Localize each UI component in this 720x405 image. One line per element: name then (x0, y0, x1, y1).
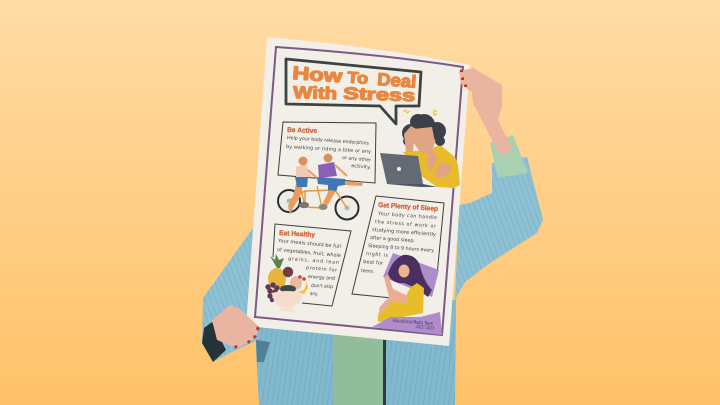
eat healthy text: don't skip (311, 283, 333, 290)
icon: tandem bicycle riders (278, 154, 363, 220)
person holding poster (202, 68, 543, 405)
left hand holding poster (212, 305, 260, 349)
title: How (292, 62, 344, 87)
eat healthy text: grains, and lean (288, 256, 339, 266)
title: With (293, 83, 337, 103)
sleep text: after a good sleep. (370, 235, 415, 244)
be active heading: Be Active (287, 127, 317, 135)
footer credit (393, 318, 434, 332)
sleep text (361, 211, 437, 275)
sleep text: the stress of work or (375, 219, 436, 230)
eat healthy heading: Eat Healthy (279, 230, 315, 239)
right hand and forearm (460, 68, 513, 155)
title speech bubble (286, 59, 421, 124)
be active text: activity. (351, 163, 371, 171)
eat healthy text: energy and (308, 274, 335, 282)
sleep box (352, 196, 444, 298)
panel: eat healthy (273, 224, 351, 306)
right fingers over poster edge (459, 68, 488, 92)
panel: get plenty of sleep (352, 196, 444, 298)
eat healthy text: any. (310, 292, 318, 297)
right sleeve (455, 157, 543, 300)
left cuff (202, 322, 226, 362)
title: Deal (377, 69, 417, 92)
poster frame (255, 47, 463, 335)
icon: fruit bowl (265, 254, 308, 312)
nails (460, 69, 467, 87)
sleep text: studying more efficiently (372, 227, 436, 238)
eat healthy text: protein for (306, 265, 337, 274)
sleep text: Sleeping 8 to 9 hours every (368, 243, 434, 254)
be active text (286, 135, 371, 171)
be active text: by walking or riding a bike or any (286, 144, 371, 155)
be active box (278, 122, 376, 183)
nails (234, 326, 260, 349)
poster sheet (246, 37, 470, 346)
jacket torso (255, 300, 456, 405)
eat healthy text: of vegetables, fruit, whole (277, 247, 341, 259)
eat healthy box (273, 224, 351, 306)
footer credit: Educational Media Team (393, 318, 434, 327)
sleep heading: Get Plenty of Sleep (378, 202, 438, 213)
icon: stressed woman with laptop (380, 110, 460, 188)
sleep text: teens. (361, 268, 374, 275)
sleep text: night is (366, 251, 389, 259)
be active text: or any other (342, 155, 371, 164)
title: To (347, 70, 369, 88)
left sleeve (202, 228, 258, 362)
be active text: Help your body release endorphins (287, 135, 370, 147)
title (292, 62, 417, 105)
sleep text: Your body can handle (377, 211, 437, 221)
sleep text: best for (363, 259, 383, 267)
icon: sleeping girl (372, 253, 442, 335)
green shirt (333, 335, 383, 405)
eat healthy text (277, 238, 341, 297)
title: Stress (343, 84, 415, 105)
shirt placket (383, 340, 386, 405)
footer credit: 2022 \ 2023 (416, 324, 434, 332)
eat healthy text: Your meals should be full (277, 238, 341, 250)
panel: be active (278, 122, 376, 183)
right shirt cuff (490, 135, 528, 178)
inner shadow at left hem (256, 340, 270, 362)
